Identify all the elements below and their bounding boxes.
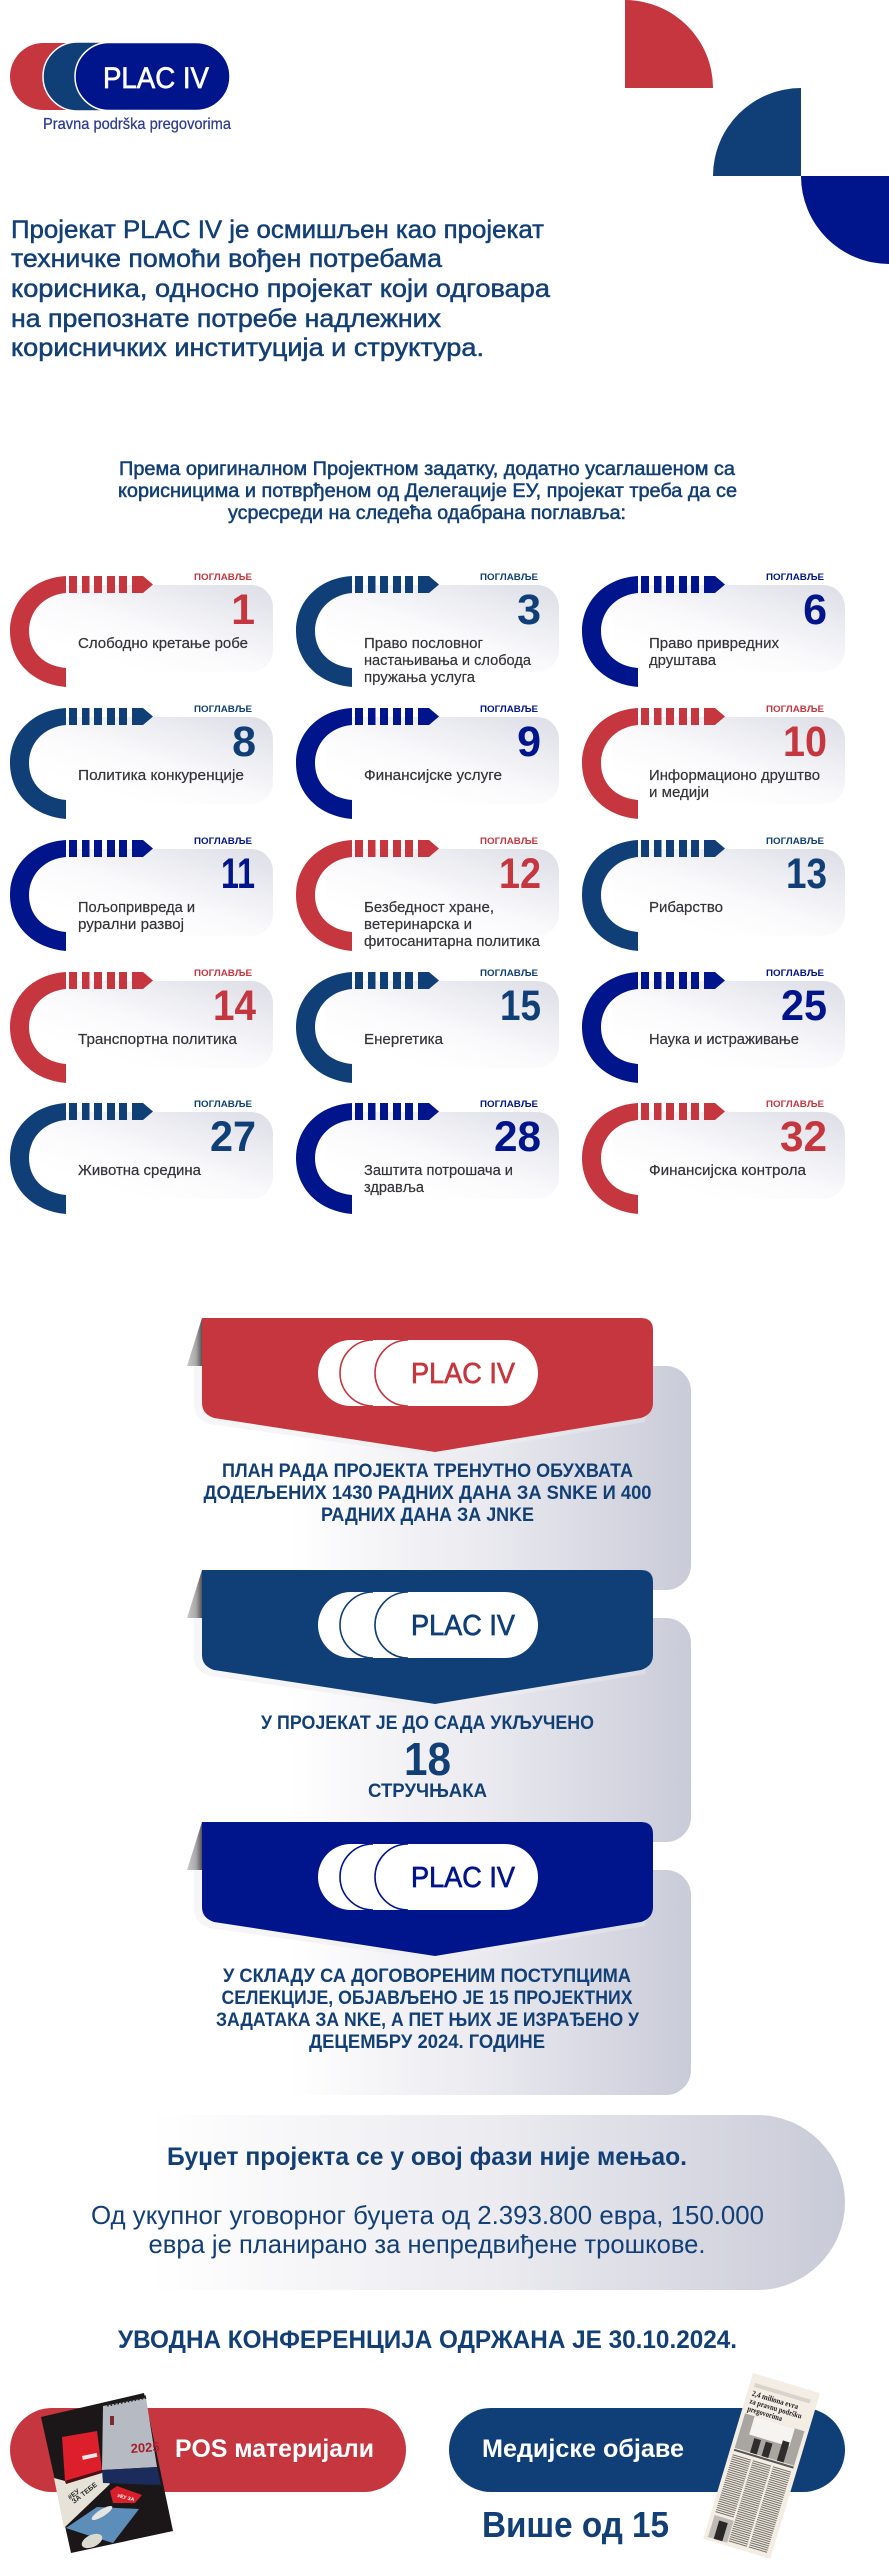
chapter card 14: ПОГЛАВЉЕ	[194, 968, 252, 979]
chapter card 27: 27	[210, 1113, 256, 1161]
chapter card 1: Слободно кретање робе	[78, 635, 248, 652]
panel: experts: СТРУЧЊАКА	[368, 1781, 487, 1802]
chapter card 32: 32	[780, 1113, 827, 1161]
chapter card 32	[582, 1099, 845, 1214]
chapter card 10: Информационо друштво	[649, 767, 820, 784]
chapter card 11: рурални развој	[78, 916, 184, 933]
chapter card 9: Финансијске услуге	[364, 767, 502, 784]
chapter card 1: ПОГЛАВЉЕ	[194, 572, 252, 583]
chapter card 6: друштава	[649, 652, 717, 669]
logo: PLAC IV: PLAC IV	[103, 62, 209, 95]
chapter card 1: 1	[231, 586, 255, 634]
panel: budget: Од укупног уговорног буџета од 2.393.800 евра, 150.000	[91, 2200, 764, 2230]
panel: work plan: ДОДЕЉЕНИХ 1430 РАДНИХ ДАНА ЗА SNKE И 400	[204, 1483, 652, 1504]
chapter card 3	[296, 572, 559, 687]
chapter card 25: ПОГЛАВЉЕ	[766, 968, 824, 979]
panel: terms of reference: PLAC IV	[411, 1862, 516, 1894]
chapter card 12: Безбедност хране,	[364, 899, 494, 916]
button: media posts	[449, 2408, 845, 2492]
intro text block: техничке помоћи вођен потребама	[11, 245, 442, 273]
chapter card 14: 14	[213, 982, 256, 1030]
panel: experts: У ПРОЈЕКАТ ЈЕ ДО САДА УКЉУЧЕНО	[261, 1713, 594, 1734]
panel: terms of reference: ДЕЦЕМБРУ 2024. ГОДИНЕ	[309, 2032, 545, 2053]
chapter card 6: 6	[803, 586, 827, 634]
chapter card 9: 9	[517, 718, 541, 766]
chapter card 13: ПОГЛАВЉЕ	[766, 836, 824, 847]
photo: POS materials: 2025	[130, 2439, 160, 2456]
panel: work plan: РАДНИХ ДАНА ЗА JNKE	[321, 1505, 534, 1526]
photo: newspaper clipping	[703, 2373, 820, 2559]
chapter card 15: ПОГЛАВЉЕ	[480, 968, 538, 979]
panel: terms of reference: ЗАДАТАКА ЗА NKE, А ПЕТ ЊИХ ЈЕ ИЗРАЂЕНО У	[216, 2010, 639, 2031]
intro text block	[11, 216, 550, 362]
chapter card 28	[296, 1099, 559, 1214]
chapter card 32: Финансијска контрола	[649, 1162, 807, 1179]
chapter card 13: Рибарство	[649, 899, 723, 916]
photo: POS materials: #ЕУ	[67, 2488, 82, 2502]
heading: conference: УВОДНА КОНФЕРЕНЦИЈА ОДРЖАНА ЈЕ 30.10.2024.	[118, 2326, 737, 2354]
chapter card 12: ветеринарска и	[364, 916, 472, 933]
chapter card 8	[10, 704, 273, 819]
chapter card 32: ПОГЛАВЉЕ	[766, 1099, 824, 1110]
panel: experts: 18	[404, 1733, 451, 1785]
panel: terms of reference: СЕЛЕКЦИЈЕ, ОБЈАВЉЕНО ЈЕ 15 ПРОЈЕКТНИХ	[222, 1988, 633, 2009]
photo: newspaper clipping: pregovorima	[746, 2404, 783, 2423]
chapter card 9: ПОГЛАВЉЕ	[480, 704, 538, 715]
chapter card 10: 10	[783, 718, 827, 766]
chapter card 27: Животна средина	[78, 1162, 202, 1179]
photo: POS materials	[41, 2393, 173, 2553]
chapter card 10: ПОГЛАВЉЕ	[766, 704, 824, 715]
photo: newspaper clipping: za pravnu podršku	[749, 2396, 803, 2421]
chapter card 8: 8	[232, 718, 256, 766]
chapter card 3: настањивања и слобода	[364, 652, 532, 669]
panel: work plan: PLAC IV	[411, 1358, 516, 1390]
intro text block: корисничких институција и структура.	[11, 334, 484, 362]
chapter card 13	[582, 836, 845, 951]
stat: more than 15: Више од 15	[482, 2504, 669, 2545]
chapter card 12: фитосанитарна политика	[364, 933, 541, 950]
button: POS materials	[10, 2408, 406, 2492]
chapter card 25	[582, 968, 845, 1083]
chapter card 12	[296, 836, 559, 951]
panel: budget	[91, 2115, 845, 2290]
button: POS materials: POS материјали	[175, 2435, 374, 2463]
chapter card 10	[582, 704, 845, 819]
decorative corner shapes	[625, 0, 889, 264]
panel: work plan	[187, 1318, 691, 1590]
chapter card 3: пружања услуга	[364, 669, 476, 686]
chapter card 14: Транспортна политика	[78, 1031, 238, 1048]
chapter card 25: Наука и истраживање	[649, 1031, 799, 1048]
chapter card 28: здравља	[364, 1179, 425, 1196]
chapter card 27	[10, 1099, 273, 1214]
chapter card 3: ПОГЛАВЉЕ	[480, 572, 538, 583]
logo: PLAC IV	[10, 42, 231, 133]
chapter card 11: 11	[221, 850, 255, 898]
chapter card 13: 13	[786, 850, 827, 898]
chapter card 6	[582, 572, 845, 687]
intro text block: на препознате потребе надлежних	[11, 305, 442, 333]
chapter card 15: Енергетика	[364, 1031, 444, 1048]
chapter card 3: 3	[517, 586, 541, 634]
panel: budget: Буџет пројекта се у овој фази није мењао.	[167, 2143, 687, 2171]
photo: POS materials: ЗА ТЕБЕ	[71, 2481, 99, 2506]
chapter card 8: ПОГЛАВЉЕ	[194, 704, 252, 715]
chapter card 28: 28	[494, 1113, 541, 1161]
chapter card 6: ПОГЛАВЉЕ	[766, 572, 824, 583]
panel: work plan: ПЛАН РАДА ПРОЈЕКТА ТРЕНУТНО ОБУХВАТА	[222, 1461, 633, 1482]
photo: newspaper clipping: 2,4 miliona evra	[751, 2389, 799, 2411]
chapter card 11	[10, 836, 273, 951]
chapter card 15: 15	[500, 982, 541, 1030]
chapter card 12: ПОГЛАВЉЕ	[480, 836, 538, 847]
panel: experts	[187, 1570, 691, 1842]
panel: budget: евра је планирано за непредвиђене трошкове.	[148, 2229, 706, 2259]
button: media posts: Медијске објаве	[482, 2435, 684, 2463]
chapters intro text	[118, 459, 737, 524]
chapters intro text: усресреди на следећа одабрана поглавља:	[228, 503, 626, 524]
chapter card 11: Пољопривреда и	[78, 899, 195, 916]
chapter card 25: 25	[781, 982, 827, 1030]
chapter card 15	[296, 968, 559, 1083]
chapters intro text: корисницима и потврђеном од Делегације ЕУ, пројекат треба да се	[118, 481, 737, 502]
panel: terms of reference: У СКЛАДУ СА ДОГОВОРЕНИМ ПОСТУПЦИМА	[223, 1966, 631, 1987]
panel: experts: PLAC IV	[411, 1610, 516, 1642]
chapter card 11: ПОГЛАВЉЕ	[194, 836, 252, 847]
chapter card 28: Заштита потрошача и	[364, 1162, 513, 1179]
chapter card 10: и медији	[649, 784, 709, 801]
logo: PLAC IV: Pravna podrška pregovorima	[43, 116, 231, 133]
chapter card 12: 12	[499, 850, 541, 898]
chapter card 14	[10, 968, 273, 1083]
chapter card 1	[10, 572, 273, 687]
chapters intro text: Према оригиналном Пројектном задатку, додатно усаглашеном са	[119, 459, 735, 480]
panel: terms of reference	[187, 1822, 691, 2095]
chapter card 3: Право пословног	[364, 635, 484, 652]
chapter card 6: Право привредних	[649, 635, 779, 652]
chapter card 27: ПОГЛАВЉЕ	[194, 1099, 252, 1110]
intro text block: корисника, односно пројекат који одговара	[11, 275, 550, 303]
chapter card 28: ПОГЛАВЉЕ	[480, 1099, 538, 1110]
chapter card 8: Политика конкуренције	[78, 767, 244, 784]
photo: POS materials: #ЕУ ЗА	[117, 2493, 135, 2503]
chapter card 9	[296, 704, 559, 819]
intro text block: Пројекат PLAC IV је осмишљен као пројекат	[11, 216, 545, 244]
